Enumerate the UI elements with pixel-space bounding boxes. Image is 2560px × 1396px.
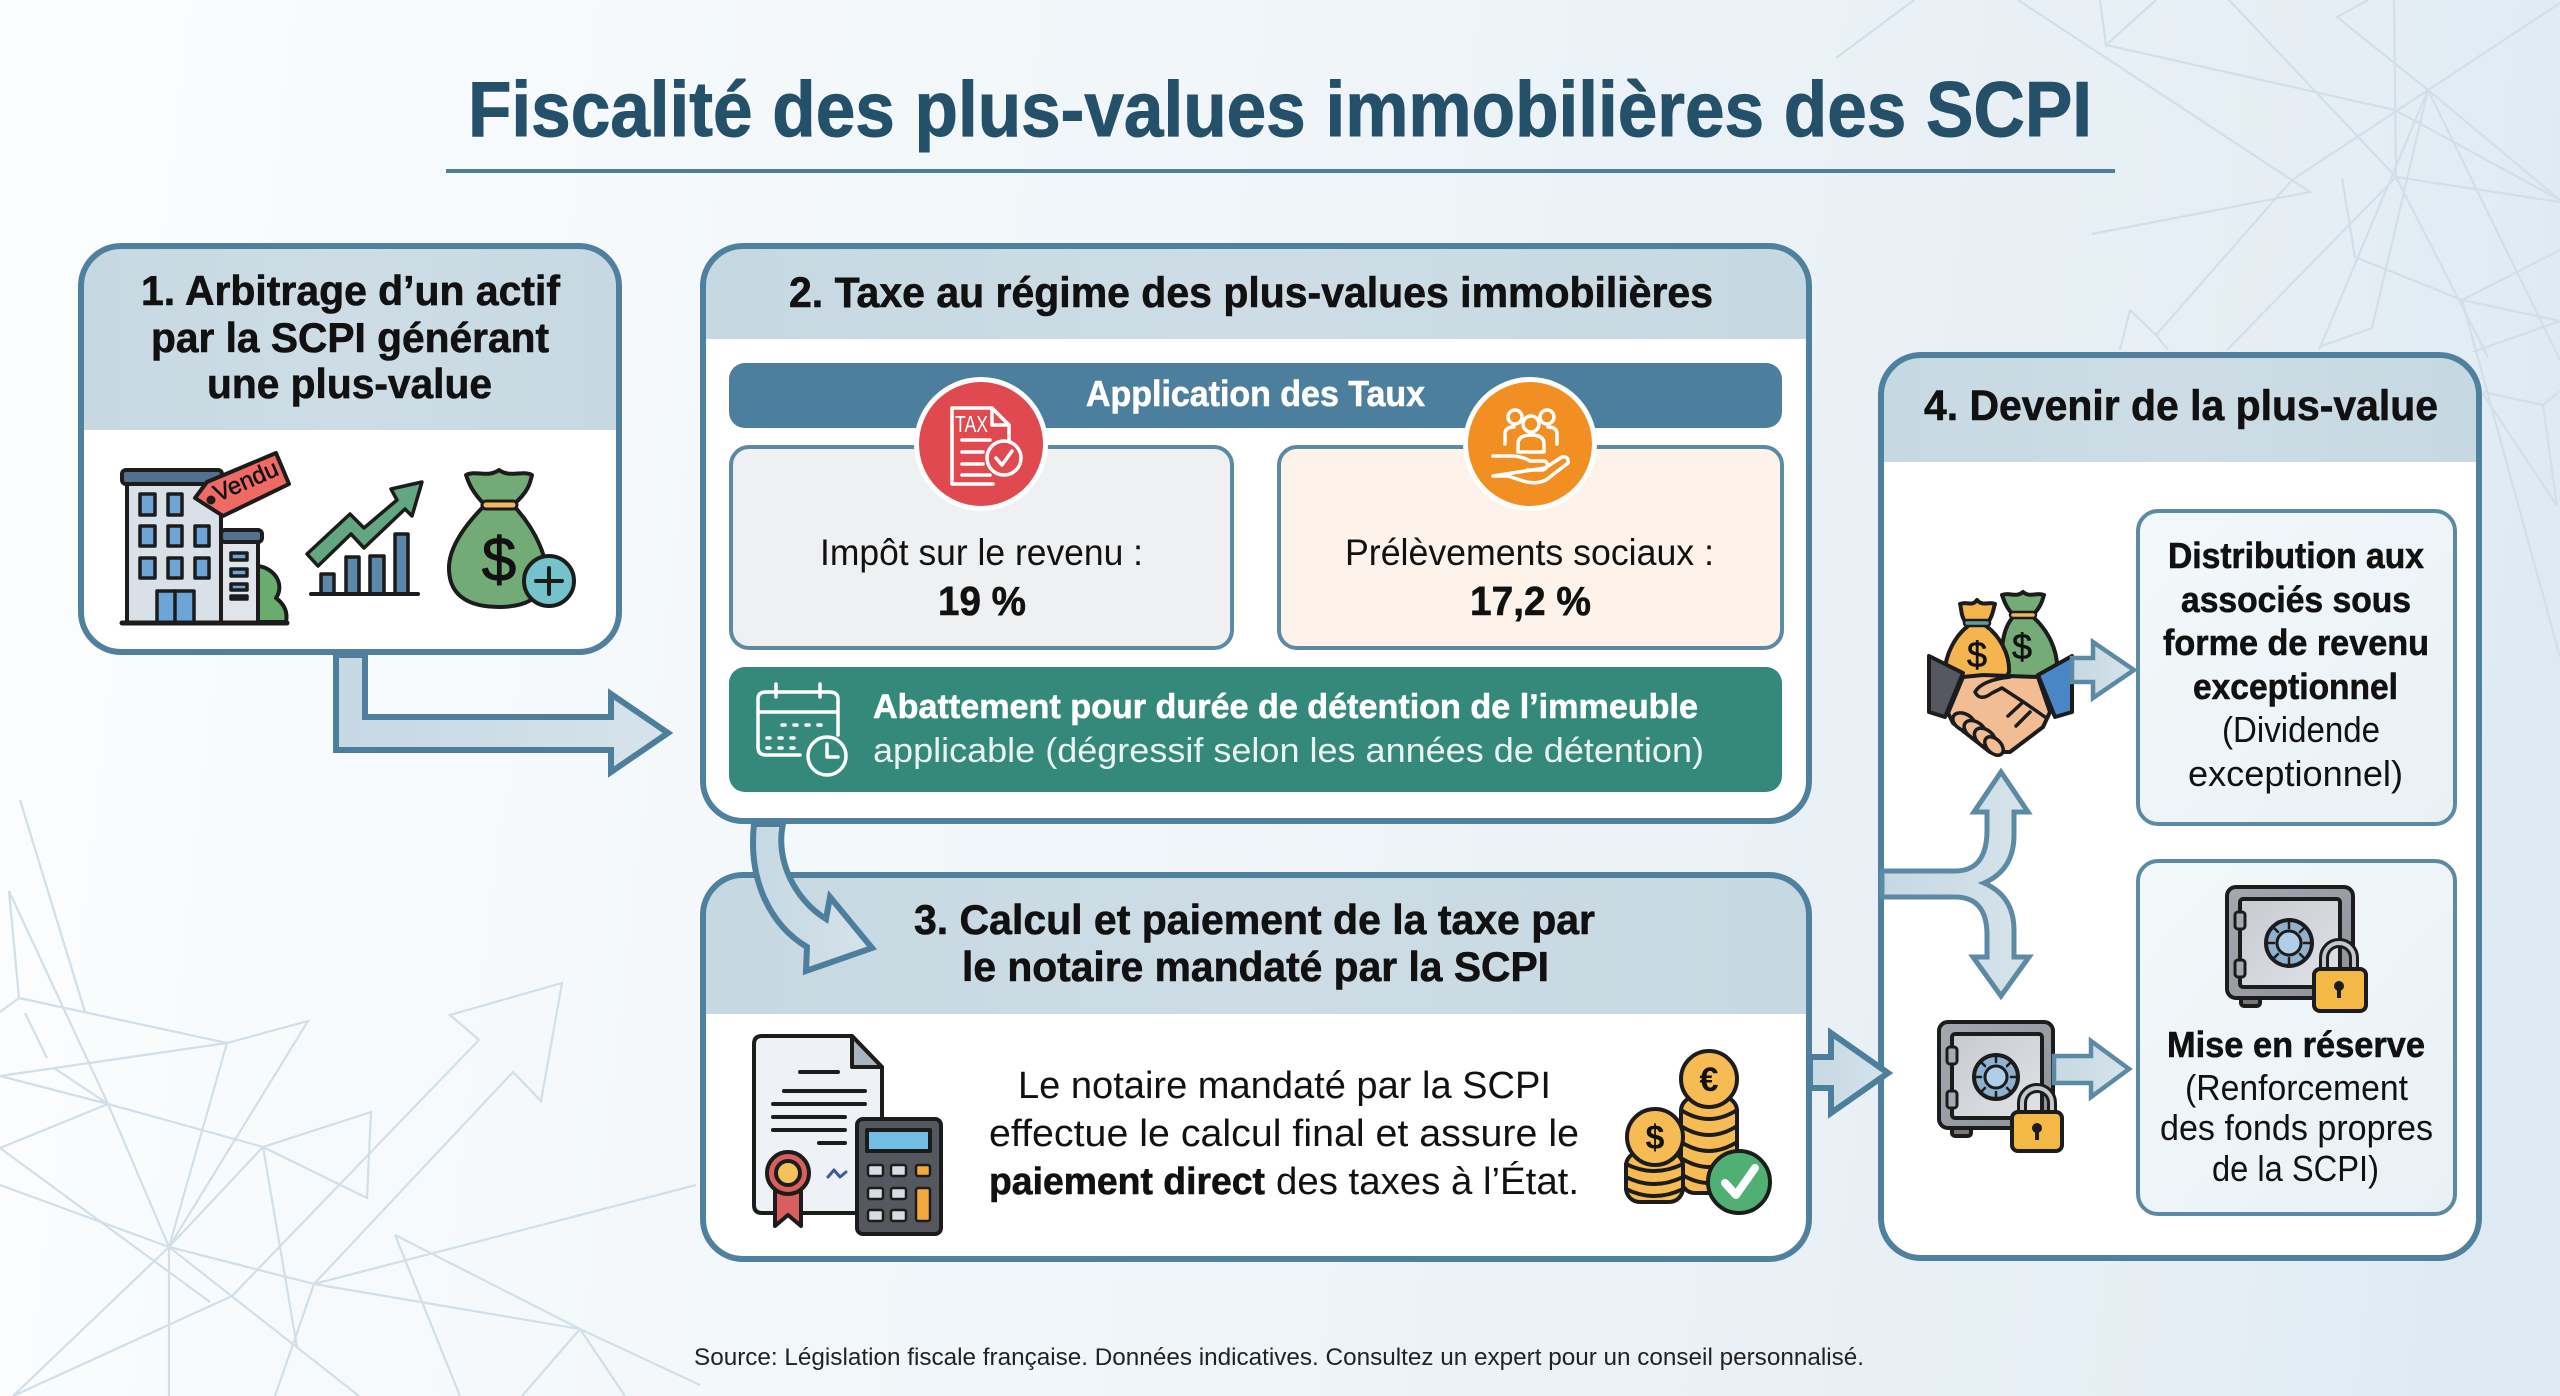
icon: building sold	[122, 453, 289, 623]
icon: handshake with money bags: $	[1967, 634, 1987, 675]
icon: tax document	[914, 377, 1048, 511]
card: prélèvements sociaux: Prélèvements sociaux :	[1345, 532, 1714, 573]
icon: rising chart	[307, 482, 422, 594]
icon: safe large	[2227, 887, 2366, 1011]
panel 3 heading: 3. Calcul et paiement de la taxe par	[914, 896, 1595, 943]
icon: handshake with money bags	[1929, 592, 2072, 759]
title: Fiscalité des plus-values immobilières des SCPI	[468, 65, 2092, 153]
arrow: 1 to 2	[336, 655, 668, 772]
icon: coins with check: €	[1700, 1061, 1719, 1099]
arrow: 3 to 4	[1810, 1033, 1888, 1113]
arrow: to reserve	[2054, 1041, 2129, 1097]
text: notaire: effectue le calcul final et assure le	[989, 1113, 1579, 1155]
icon: money bag with plus: $	[482, 526, 516, 595]
card: mise en réserve: de la SCPI)	[2212, 1148, 2379, 1189]
card: distribution: exceptionnel)	[2188, 753, 2403, 794]
text: notaire	[989, 1065, 1579, 1203]
arrow: 2 to 3	[753, 824, 872, 971]
card: distribution: Distribution aux	[2168, 535, 2424, 576]
card: mise en réserve: (Renforcement	[2185, 1067, 2408, 1108]
card: impôt sur le revenu: Impôt sur le revenu :	[820, 532, 1143, 573]
text: notaire: des taxes à l’État.	[1276, 1160, 1579, 1203]
card: distribution: exceptionnel	[2193, 666, 2398, 707]
icon: safe small	[1939, 1022, 2062, 1151]
card: impôt sur le revenu	[731, 447, 1232, 648]
arrow: to distribution	[2072, 642, 2134, 698]
icon: notarial document and calculator	[754, 1036, 941, 1234]
icon: coins with check	[1626, 1051, 1770, 1213]
icon: handshake with money bags: $	[2012, 626, 2032, 667]
panel 4 heading: 4. Devenir de la plus-value	[1924, 382, 2438, 430]
abatement banner	[729, 667, 1782, 792]
source note: Source: Législation fiscale française. Données indicatives. Consultez un expert pour un conseil personnalisé.	[694, 1344, 1864, 1371]
card: mise en réserve: Mise en réserve	[2167, 1024, 2425, 1065]
card: distribution: associés sous	[2181, 579, 2411, 620]
card: prélèvements sociaux: 17,2 %	[1470, 578, 1591, 624]
panel 2 heading: 2. Taxe au régime des plus-values immobilières	[789, 269, 1713, 317]
panel 1 heading: par la SCPI générant	[151, 314, 549, 361]
icon: tax document: TAX	[955, 411, 988, 437]
panel 2: taxe	[703, 246, 1809, 821]
card: mise en réserve: des fonds propres	[2160, 1107, 2433, 1148]
card: impôt sur le revenu: 19 %	[938, 578, 1026, 624]
text: notaire: paiement direct	[989, 1161, 1265, 1203]
card: prélèvements sociaux	[1279, 447, 1782, 648]
panel 3: calcul et paiement	[703, 875, 1809, 1259]
arrow: fork	[1882, 772, 2029, 996]
text: notaire: Le notaire mandaté par la SCPI	[1018, 1065, 1551, 1107]
panel 3 heading: le notaire mandaté par la SCPI	[962, 943, 1549, 990]
rates banner: Application des Taux	[1086, 373, 1425, 414]
label: Vendu tag: Vendu	[209, 455, 283, 507]
card: distribution	[2138, 511, 2455, 824]
icon: coins with check: $	[1646, 1119, 1665, 1157]
icon: calendar with clock	[758, 684, 846, 775]
card: distribution: (Dividende	[2222, 709, 2380, 750]
card: distribution: forme de revenu	[2163, 622, 2429, 663]
abatement banner: applicable (dégressif selon les années de détention)	[873, 732, 1704, 770]
panel 1 heading: une plus-value	[207, 360, 492, 407]
panel 4: devenir	[1881, 355, 2479, 1258]
panel 1 heading: 1. Arbitrage d’un actif	[141, 267, 561, 314]
panel 1 heading	[141, 267, 561, 407]
icon: money bag with plus	[449, 470, 574, 607]
panel 1: arbitrage	[81, 246, 619, 652]
card: mise en réserve	[2138, 861, 2455, 1214]
rates banner	[729, 363, 1782, 428]
icon: people in hand	[1463, 377, 1597, 511]
panel 3 heading	[914, 896, 1595, 990]
abatement banner: Abattement pour durée de détention de l’immeuble	[873, 688, 1698, 726]
